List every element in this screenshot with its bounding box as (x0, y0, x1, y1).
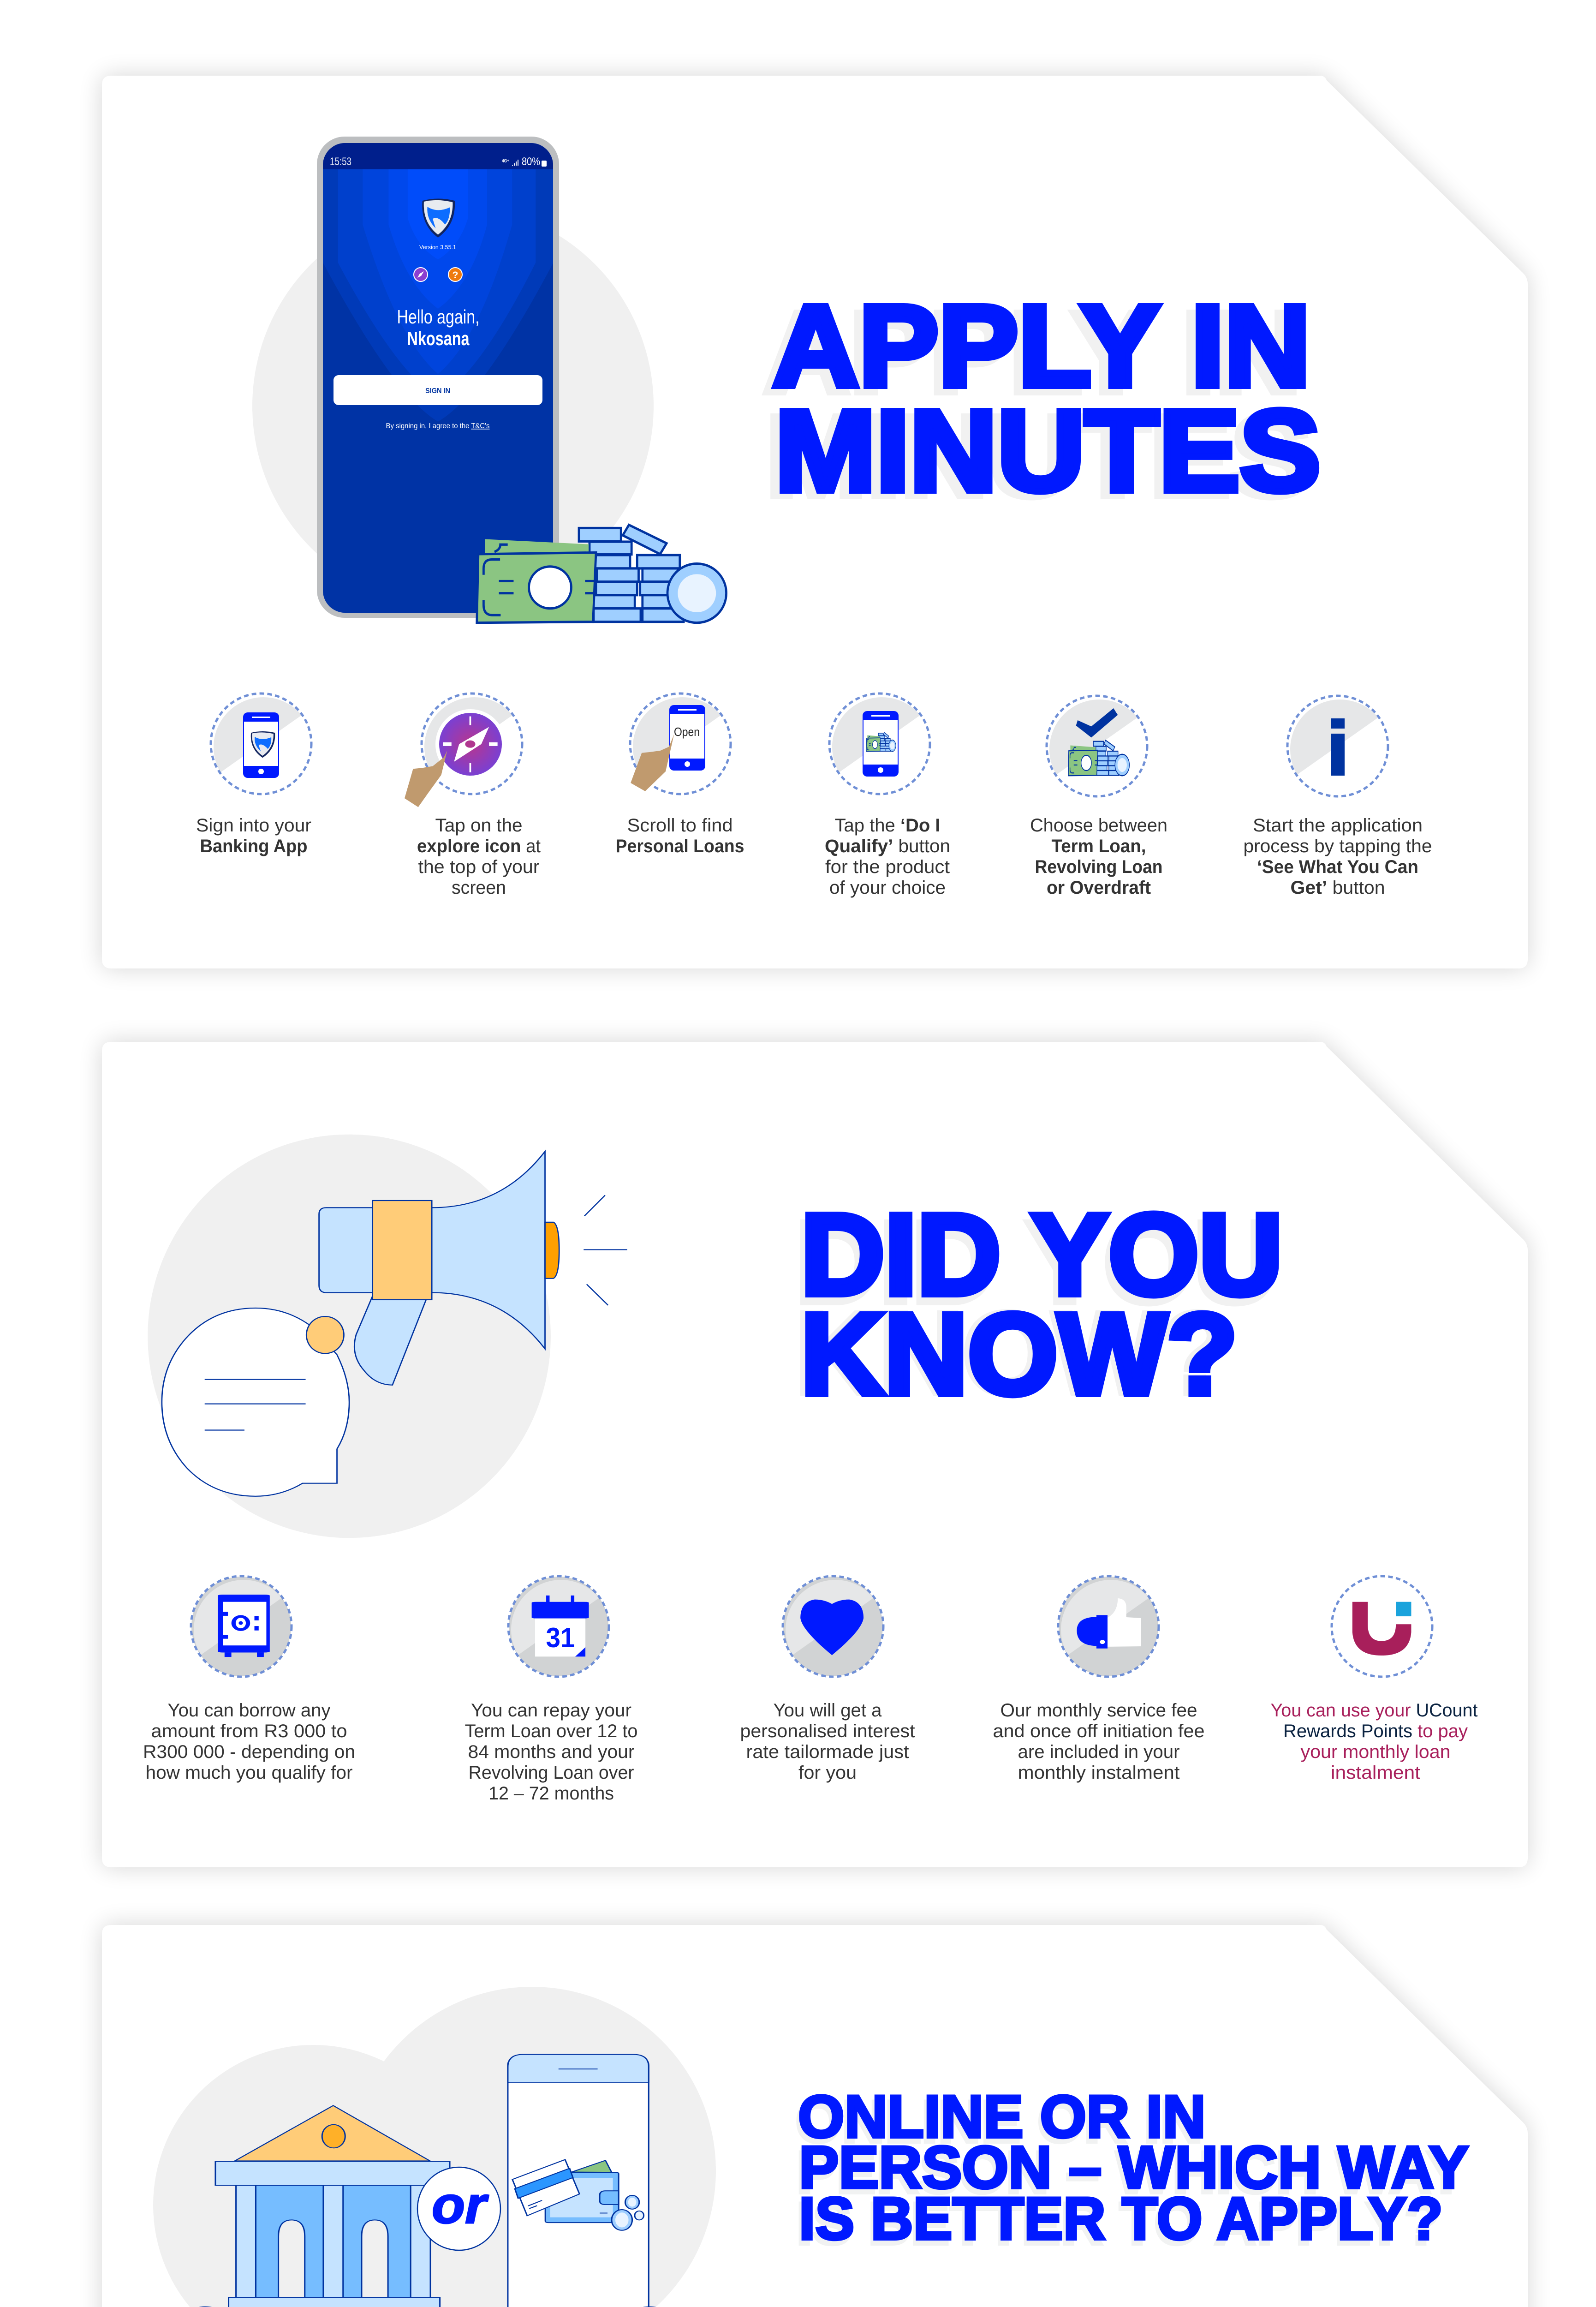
step 6: start application: process by tapping the (1244, 836, 1432, 856)
step 2: explore icon: explore icon at (417, 836, 541, 856)
title: did you know (796, 1190, 1283, 1418)
fact: fees included: monthly instalment (1018, 1763, 1180, 1783)
fact: borrow amount (143, 1576, 355, 1783)
step 3: scroll: Scroll to find (627, 815, 732, 836)
fact: borrow amount: how much you qualify for (146, 1763, 352, 1783)
fact: repayment term: You can repay your (471, 1700, 631, 1721)
sign in button: SIGN IN (425, 387, 450, 395)
fact: repayment term: 31 (546, 1622, 575, 1653)
step 6: start application: Get’ button (1291, 878, 1385, 898)
phone status bar: 15:53 (330, 155, 351, 168)
icon: notes and coins (477, 525, 727, 623)
phone status bar: 4G+ (502, 158, 509, 164)
icon: help (448, 268, 462, 281)
title: did you know: KNOW? (801, 1290, 1238, 1418)
fact: fees included (993, 1576, 1205, 1783)
title: online or in person: ONLINE OR IN (798, 2083, 1206, 2150)
fact: personalised rate: rate tailormade just (746, 1742, 909, 1762)
title: online or in person: ONLINE OR IN (795, 2088, 1203, 2155)
title: online or in person (795, 2083, 1469, 2257)
greeting (397, 306, 480, 349)
step 5: choose product: Revolving Loan (1035, 857, 1162, 877)
title: did you know: DID YOU (796, 1198, 1278, 1327)
illustration: banking app phone with money (252, 137, 727, 623)
step 3: scroll: Personal Loans (615, 836, 744, 856)
icon: small compass (414, 268, 428, 281)
fact: repayment term: Revolving Loan over (469, 1763, 634, 1783)
fact: personalised rate: You will get a (773, 1700, 882, 1721)
step 3: scroll: Open (674, 725, 700, 739)
step 4: do i qualify: of your choice (829, 878, 946, 898)
step 4: do i qualify: Tap the ‘Do I (835, 815, 940, 836)
step 2: explore icon (405, 693, 541, 898)
panel: apply in minutes (102, 76, 1528, 968)
fact: repayment term (465, 1576, 637, 1804)
fact: borrow amount: You can borrow any (168, 1700, 330, 1721)
bank shield logo (422, 199, 455, 238)
title: online or in person: PERSON – WHICH WAY (796, 2139, 1466, 2206)
phone status bar (330, 155, 547, 168)
step 1: sign in: Banking App (200, 836, 307, 856)
title: did you know: KNOW? (796, 1289, 1233, 1417)
fact: personalised rate (740, 1576, 915, 1783)
title: online or in person: IS BETTER TO APPLY? (799, 2185, 1443, 2252)
title: apply in minutes: MINUTES (766, 392, 1311, 520)
title: apply in minutes: MINUTES (775, 386, 1321, 515)
title: apply in minutes: APPLY IN (763, 288, 1301, 417)
step 5: choose product: or Overdraft (1047, 878, 1151, 898)
title: online or in person: PERSON – WHICH WAY (799, 2134, 1469, 2201)
icon: or badge (417, 2167, 500, 2250)
step 5: choose product: Term Loan, (1052, 836, 1146, 856)
fact: ucount rewards: instalment (1331, 1763, 1420, 1783)
step 6: start application (1244, 696, 1432, 898)
icon: help: ? (453, 270, 458, 281)
icon: phone with wallet (508, 2055, 649, 2307)
fact: ucount rewards: Rewards Points to pay (1283, 1721, 1468, 1741)
icon: bank building (208, 2105, 454, 2307)
panel: did you know (102, 1042, 1528, 1867)
fact: personalised rate: personalised interest (740, 1721, 915, 1741)
fact: borrow amount: amount from R3 000 to (151, 1721, 347, 1741)
step 2: explore icon: the top of your (418, 857, 540, 877)
title: apply in minutes (763, 281, 1321, 520)
step 1: sign in: Sign into your (196, 815, 311, 836)
fact: fees included: are included in your (1018, 1742, 1180, 1762)
fact: repayment term: 84 months and your (468, 1742, 635, 1762)
step 5: choose product: Choose between (1030, 815, 1167, 836)
icon: or badge: or (432, 2176, 489, 2234)
step 3: scroll (615, 693, 744, 856)
title: apply in minutes: APPLY IN (773, 281, 1310, 410)
fact: personalised rate: for you (798, 1763, 857, 1783)
step 4: do i qualify: Qualify’ button (825, 836, 950, 856)
illustration: megaphone and speech bubble (148, 1135, 627, 1538)
fact: ucount rewards: You can use your UCount (1270, 1700, 1478, 1721)
greeting: Nkosana (407, 328, 470, 349)
app version: Version 3.55.1 (419, 244, 456, 251)
step 1: sign in (196, 693, 311, 856)
greeting: Hello again, (397, 306, 480, 328)
fact: fees included: Our monthly service fee (1000, 1700, 1197, 1721)
fact: ucount rewards: your monthly loan (1301, 1742, 1450, 1762)
step 4: do i qualify (825, 693, 950, 898)
step 4: do i qualify: for the product (825, 857, 950, 877)
fact: borrow amount: R300 000 - depending on (143, 1742, 355, 1762)
step 5: choose product (1030, 696, 1167, 898)
fact: ucount rewards (1270, 1576, 1478, 1783)
terms text: By signing in, I agree to the T&C's (386, 422, 490, 430)
illustration: bank or phone (142, 1987, 716, 2307)
fact: fees included: and once off initiation fee (993, 1721, 1205, 1741)
fact: repayment term: Term Loan over 12 to (465, 1721, 637, 1741)
fact: repayment term: 12 – 72 months (488, 1783, 614, 1804)
step 2: explore icon: Tap on the (435, 815, 522, 836)
title: online or in person: IS BETTER TO APPLY? (796, 2190, 1440, 2257)
step 6: start application: ‘See What You Can (1257, 857, 1418, 877)
title: did you know: DID YOU (801, 1190, 1283, 1319)
phone status bar: 80% (522, 155, 540, 168)
step 2: explore icon: screen (452, 878, 506, 898)
step 6: start application: Start the application (1253, 815, 1423, 836)
sign in button (333, 375, 542, 405)
panel: online or in person (102, 1925, 1528, 2307)
